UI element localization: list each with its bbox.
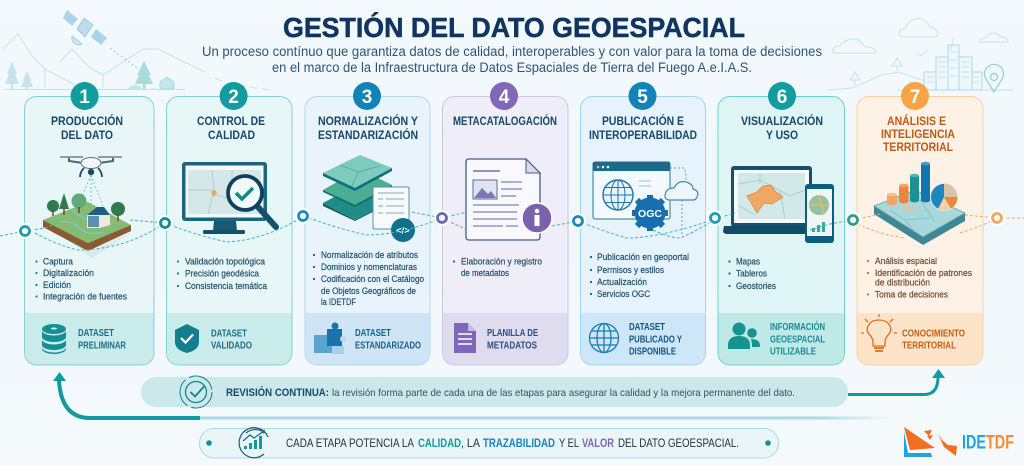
list: Tableros: [736, 268, 768, 278]
logo: IDETDF: [904, 427, 1014, 457]
icon: monitor with magnifier: [182, 162, 276, 234]
heading: PRODUCCIÓN: [51, 115, 123, 128]
list: Permisos y estilos: [597, 265, 665, 275]
review bar: revisión continua: la revisión forma parte de cada una de las etapas para asegurar la calidad y la mejora permanente del dato.: [332, 387, 795, 399]
list: Precisión geodésica: [185, 268, 259, 278]
badge 4: 4: [499, 87, 510, 108]
logo: IDETDF: TDF: [986, 432, 1014, 454]
output: dataset preliminar: DATASET: [78, 328, 114, 339]
badge 6: [768, 82, 796, 110]
list: [35, 256, 128, 302]
panel: 2 control de calidad: [166, 82, 292, 365]
icon: browser, globe, gear and cloud: [593, 162, 698, 235]
badge 7: 7: [910, 87, 920, 108]
icon: form: [454, 323, 476, 353]
badge 4: [490, 82, 518, 110]
output: dataset estandarizado: ESTANDARIZADO: [355, 340, 421, 352]
right arrow: [848, 369, 945, 394]
list: Actualización: [597, 277, 647, 287]
heading: [51, 115, 123, 142]
icon: map layers and document: [323, 155, 415, 242]
badge 3: [353, 82, 381, 110]
list: Análisis espacial: [875, 256, 937, 266]
list: Captura: [43, 256, 73, 266]
icon: satellite: [63, 10, 137, 68]
output: dataset estandarizado: [314, 322, 421, 354]
icon: circular check: [180, 376, 212, 408]
list: Servicios OGC: [597, 289, 651, 299]
output: dataset validado: [175, 324, 252, 353]
output: dataset estandarizado: DATASET: [355, 328, 391, 339]
heading: PUBLICACIÓN E: [602, 115, 684, 128]
panel: 6 visualización y uso: [718, 82, 844, 365]
nodes: [17, 208, 1005, 239]
output: dataset publicado y disponible: [590, 322, 682, 358]
badge 2: 2: [228, 87, 239, 108]
list: de Objetos Geográficos de: [321, 286, 416, 296]
logo: IDETDF: IDE: [962, 432, 986, 454]
list: Publicación en geoportal: [597, 252, 689, 262]
output: información geoespacial utilizable: [728, 320, 825, 358]
heading: INTELIGENCIA: [881, 129, 955, 141]
icon: growth chart: [239, 428, 268, 458]
list: Integración de fuentes: [43, 292, 128, 302]
output: dataset validado: DATASET: [211, 328, 247, 340]
icon: shield: [175, 324, 199, 353]
icon: drone and terrain: [43, 157, 132, 258]
icon: database: [42, 324, 66, 354]
heading: [589, 115, 697, 142]
panel: 1 producción del dato: [24, 82, 154, 365]
bottom message bar: DEL DATO GEOESPACIAL.: [618, 438, 739, 450]
list: Validación topológica: [185, 256, 265, 266]
icon: puzzle: [314, 322, 346, 354]
output: dataset publicado y disponible: DATASET: [629, 322, 665, 333]
panel: 3 normalización y estandarización: [305, 82, 430, 365]
list: la IDETDF: [321, 297, 357, 307]
list: [177, 256, 267, 291]
list: Consistencia temática: [185, 281, 267, 291]
heading: ESTANDARIZACIÓN: [318, 129, 418, 142]
list: Edición: [43, 280, 71, 290]
heading: CONTROL DE: [197, 116, 265, 128]
heading: INTEROPERABILIDAD: [589, 130, 697, 142]
heading: TERRITORIAL: [883, 142, 953, 154]
list: [728, 256, 777, 291]
list: Geostories: [736, 281, 777, 291]
list: Codificación con el Catálogo: [321, 274, 424, 284]
bottom message bar: CALIDAD: [418, 438, 461, 450]
heading: VISUALIZACIÓN: [741, 115, 823, 128]
badge 2: [220, 82, 248, 110]
heading: NORMALIZACIÓN Y: [318, 115, 418, 128]
panel: 5 publicación e interoperabilidad: [580, 82, 706, 365]
bottom message bar: CADA ETAPA POTENCIA LA: [286, 438, 414, 450]
bottom message bar: , LA: [461, 438, 480, 450]
list: [867, 256, 973, 300]
heading: Y USO: [766, 130, 798, 142]
badge 5: 5: [637, 87, 648, 108]
output: conocimiento territorial: TERRITORIAL: [902, 340, 956, 352]
list: Normalización de atributos: [321, 250, 419, 260]
badge 3: 3: [362, 87, 372, 108]
list: de distribución: [875, 278, 930, 288]
badge 6: 6: [777, 87, 787, 108]
heading: ANÁLISIS E: [887, 115, 946, 128]
output: dataset validado: VALIDADO: [211, 340, 252, 352]
review bar: revisión continua: REVISIÓN CONTINUA:: [226, 386, 329, 399]
output: información geoespacial utilizable: UTILIZABLE: [770, 346, 816, 358]
output: dataset publicado y disponible: PUBLICADO Y: [629, 334, 682, 346]
list: Mapas: [736, 256, 761, 266]
list: [313, 250, 424, 307]
output: dataset publicado y disponible: DISPONIBLE: [629, 346, 676, 358]
list: Digitalización: [43, 268, 94, 278]
heading: CALIDAD: [208, 130, 255, 142]
bottom message bar: [200, 428, 778, 458]
subtitle: en el marco de la Infraestructura de Datos Espaciales de Tierra del Fuego A.e.I.A.S.: [272, 60, 752, 75]
output: información geoespacial utilizable: INFORMACIÓN: [770, 320, 825, 333]
decoration: mountains, satellite and trees: [3, 10, 270, 90]
icon: browser, globe, gear and cloud: OGC: [638, 208, 662, 220]
badge 7: [901, 82, 929, 110]
heading: METACATALOGACIÓN: [453, 115, 557, 128]
heading: DEL DATO: [61, 130, 113, 142]
badge 5: [628, 82, 656, 110]
icon: document with info: [466, 159, 552, 240]
heading: [318, 115, 418, 142]
list: Identificación de patrones: [875, 268, 973, 278]
panel: 4 metacatalogación: [442, 82, 568, 365]
heading: [881, 115, 955, 154]
heading: [741, 115, 823, 142]
decoration: clouds, city skyline and location pin: [829, 19, 1014, 92]
icon: map layers and document: </>: [396, 226, 410, 236]
subtitle: [202, 44, 822, 75]
list: [590, 252, 689, 299]
output: dataset preliminar: [42, 324, 127, 354]
badge 1: [71, 82, 99, 110]
icon: laptop and phone with maps: [723, 166, 834, 243]
icon: globe: [590, 324, 618, 352]
icon: users: [728, 322, 760, 349]
output: planilla de metadatos: PLANILLA DE: [487, 328, 538, 339]
output: información geoespacial utilizable: GEOESPACIAL: [770, 334, 825, 346]
output: dataset preliminar: PRELIMINAR: [78, 340, 127, 352]
data flow network line with nodes: [0, 208, 1024, 250]
panel: 7 análisis e inteligencia territorial: [857, 82, 983, 365]
output: conocimiento territorial: [861, 314, 965, 352]
list: Dominios y nomenclaturas: [321, 262, 418, 272]
output: planilla de metadatos: [454, 323, 538, 353]
icon: bar and pie chart on map: [874, 162, 965, 245]
bottom message bar: Y EL: [559, 438, 579, 450]
list: de metadatos: [461, 268, 510, 278]
output: planilla de metadatos: METADATOS: [487, 340, 537, 352]
bottom message bar: TRAZABILIDAD: [483, 438, 555, 450]
title: GESTIÓN DEL DATO GEOESPACIAL: [283, 12, 745, 43]
bottom message bar: VALOR: [582, 438, 615, 450]
output: conocimiento territorial: CONOCIMIENTO: [902, 328, 965, 340]
heading: [197, 116, 265, 142]
badge 1: 1: [79, 87, 90, 108]
left return arrow: [53, 372, 890, 420]
subtitle: Un proceso contínuo que garantiza datos de calidad, interoperables y con valor para la toma de decisiones: [202, 44, 822, 59]
list: [453, 256, 542, 278]
list: Toma de decisiones: [875, 290, 949, 300]
list: Elaboración y registro: [461, 256, 542, 266]
review bar: revisión continua: [141, 376, 848, 408]
icon: light bulb: [861, 314, 897, 351]
